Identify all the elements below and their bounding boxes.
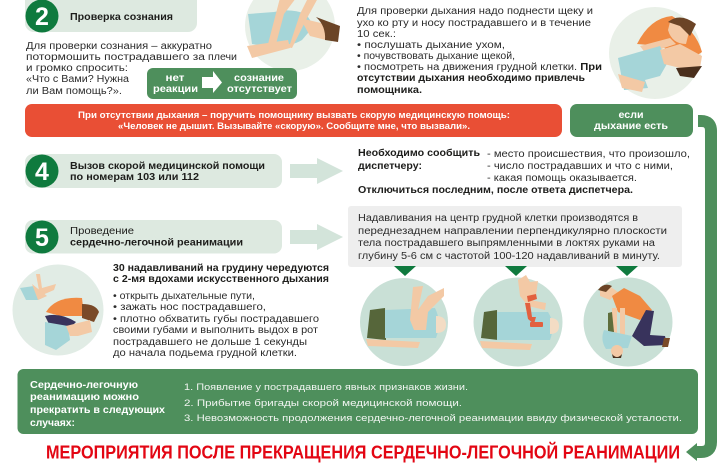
illustration: shaking shoulders — [245, 0, 340, 71]
text: breaths instructions — [113, 263, 329, 359]
red banner: call ambulance: «Человек не дышит. Вызывайте «скорую». Сообщите мне, что вызвали». — [118, 121, 470, 132]
step 5 header: сердечно-легочной реанимации — [70, 238, 243, 248]
callout: no reaction, no consciousness — [147, 68, 297, 99]
grey box: compressions text — [348, 206, 682, 267]
illustration: CPR posture — [584, 278, 672, 366]
text: breaths instructions: пострадавшего не дольше 1 секунды — [113, 337, 307, 348]
text: consciousness check: ли Вам помощь?». — [26, 86, 122, 97]
arrow: step 4 — [290, 158, 343, 184]
step 5 header — [25, 220, 282, 254]
callout: no reaction, no consciousness: отсутствует — [227, 84, 292, 95]
text: dispatcher info: диспетчеру: — [358, 161, 422, 172]
green box: if breathing: если — [618, 110, 644, 121]
green box: if breathing — [570, 104, 693, 137]
text: breathing check: 10 сек.: — [357, 29, 396, 40]
text: breaths instructions: своими губами и выполнить выдох в рот — [113, 324, 318, 336]
text: breathing check: • почувствовать дыхание щекой, — [357, 51, 515, 62]
arrow: step 5 — [290, 224, 343, 250]
text: breaths instructions: • зажать нос пострадавшего, — [113, 302, 266, 313]
text: consciousness check: потормошить пострадавшего за — [26, 52, 206, 63]
text: breaths instructions: • плотно обхватить губы пострадавшего — [113, 313, 319, 325]
panel: when CPR can be stopped: случаях: — [30, 418, 75, 429]
panel: when CPR can be stopped: 1. Появление у пострадавшего явных признаков жизни. — [184, 382, 468, 393]
callout: no reaction, no consciousness: нет — [166, 73, 185, 84]
text: breathing check: ухо ко рту и носу пострадавшего и в течение — [357, 18, 591, 29]
text: breaths instructions: • открыть дыхательные пути, — [113, 291, 255, 302]
panel: when CPR can be stopped: Сердечно-легочную — [30, 380, 138, 391]
grey box: compressions text: тела пострадавшего выпрямленными в локтях руками на — [358, 238, 655, 249]
red banner: call ambulance — [25, 104, 562, 137]
step 4 header: по номерам 103 или 112 — [70, 172, 199, 183]
text: breathing check: отсутствии дыхания необходимо привлечь — [357, 72, 585, 84]
text: consciousness check: «Что с Вами? Нужна — [26, 74, 129, 85]
step 4 header: Вызов скорой медицинской помощи — [70, 161, 265, 172]
arrow: right side to bottom heading — [686, 121, 711, 461]
panel: when CPR can be stopped: 2. Прибытие бригады скорой медицинской помощи. — [184, 398, 462, 409]
step 2 header: 2 — [35, 3, 49, 31]
step 5 header: Проведение — [70, 226, 134, 237]
illustration: rescue breathing — [12, 264, 104, 356]
illustration: hand placement — [474, 275, 562, 366]
grey box: compressions text: переднезаднем направлении перпендикулярно плоскости — [358, 226, 667, 237]
text: breathing check: • послушать дыхание ухом, — [357, 40, 505, 51]
text: breathing check: помощника. — [357, 85, 422, 96]
grey box: compressions text: Надавливания на центр грудной клетки производятся в — [358, 213, 638, 224]
panel: when CPR can be stopped: 3. Невозможность продолжения сердечно-легочной реанимации ввиду физической усталости. — [184, 413, 682, 424]
red banner: call ambulance: При отсутствии дыхания – поручить помощнику вызвать скорую медицинскую помощь: — [78, 110, 510, 121]
panel: when CPR can be stopped: прекратить в следующих — [30, 405, 165, 416]
illustration: hands on chest — [360, 278, 448, 366]
text: consciousness check — [26, 41, 237, 97]
text: breaths instructions: 30 надавливаний на грудину чередуются — [113, 263, 329, 274]
text: dispatcher info: - какая помощь оказывается. — [487, 173, 637, 184]
text: breathing check: • посмотреть на движения грудной клетки. При — [357, 62, 602, 73]
text: dispatcher info: - число пострадавших и что с ними, — [487, 161, 673, 172]
pointer triangles — [394, 266, 638, 276]
text: dispatcher info: - место происшествия, что произошло, — [487, 149, 690, 160]
text: breaths instructions: до начала подьема грудной клетки. — [113, 348, 297, 359]
callout: no reaction, no consciousness: реакции — [153, 84, 198, 95]
green box: if breathing: дыхание есть — [594, 121, 668, 132]
text: consciousness check: плечи — [208, 52, 237, 63]
callout: no reaction, no consciousness: сознание — [234, 73, 284, 84]
text: breathing check — [357, 6, 602, 96]
panel: when CPR can be stopped — [18, 369, 698, 434]
text: dispatcher info: Отключиться последним, после ответа диспетчера. — [358, 185, 633, 196]
text: consciousness check: и громко спросить: — [26, 63, 128, 74]
step 5 header: 5 — [35, 224, 49, 252]
step 4 header: 4 — [35, 158, 49, 186]
grey box: compressions text: глубину 5-6 см с частотой 100-120 надавливаний в минуту. — [358, 250, 660, 262]
step 2 header: Проверка сознания — [70, 12, 173, 23]
text: dispatcher info: Необходимо сообщить — [358, 147, 480, 159]
text: breaths instructions: с 2-мя вдохами искусственного дыхания — [113, 274, 329, 285]
panel: when CPR can be stopped: реанимацию можно — [30, 392, 139, 403]
step 4 header — [25, 154, 282, 188]
text: breathing check: Для проверки дыхания надо поднести щеку и — [357, 6, 593, 17]
step 2 header — [25, 0, 197, 32]
text: consciousness check: Для проверки сознания – аккуратно — [26, 41, 212, 52]
text: dispatcher info — [358, 147, 690, 196]
illustration: listening to breath — [609, 7, 702, 99]
